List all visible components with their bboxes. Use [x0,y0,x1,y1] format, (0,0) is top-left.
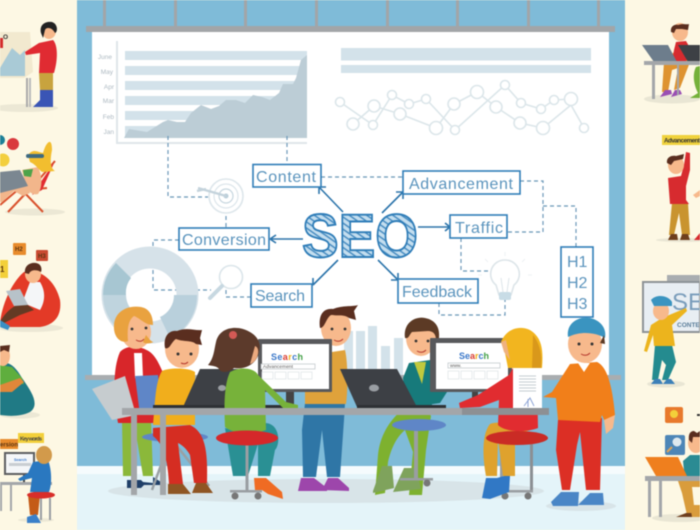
label box: Feedback: Feedback [402,284,473,301]
mini scene: woman on deck chair [0,135,65,216]
mini scene: H tags: H3 [38,254,46,260]
label box: Search [251,284,312,307]
person: standing man [298,305,358,491]
label box: H1 H2 H3: H1 [567,254,588,271]
whiteboard tray [85,375,621,380]
office wall [77,0,625,466]
laptop right [340,369,446,408]
mini scene: H tags: 1 [0,265,5,274]
SEO title: SEO [302,202,418,270]
area chart: May [101,69,114,76]
mini scene: boy at monitor with tags [0,433,55,523]
monitor left: Advancement [263,364,294,370]
window frame [86,0,615,32]
label box: Feedback [398,279,478,303]
label box: Advancement [403,171,520,194]
mini scene: woman at flip chart: O [3,34,8,41]
monitor right: www. [450,364,461,369]
label box: Traffic: Traffic [455,220,503,237]
icon: light bulb [478,252,532,300]
mini scene: boy at monitor with tags: Key words [20,436,42,442]
area chart: June [98,54,112,61]
stool right [500,440,533,500]
whiteboard [92,32,609,375]
label box: Advancement: Advancement [409,176,514,193]
person: boy in yellow sweater [153,329,213,494]
top right bars [341,48,591,73]
area chart: Apr [104,84,115,91]
mini scene: H tags [0,243,48,278]
mini scene: man on teal bean bag [0,345,40,418]
mini scene: H tags: H2 [15,247,23,253]
person: boy in blue cap [543,318,615,506]
grey laptop left [92,376,136,420]
arrows from SEO [270,187,450,285]
label box: Traffic [450,215,507,238]
label box: Search: Search [255,288,305,305]
area chart [98,41,307,143]
mini scene: boy at SEO board [643,275,700,388]
person: man in teal jacket [373,318,447,495]
left cream panel [0,0,77,530]
area chart: Jan [104,129,114,136]
person: girl in green hoodie [208,328,298,499]
blue stool [392,419,446,486]
area chart: Feb [103,114,114,121]
desk [122,408,549,495]
label box: Content [253,164,321,187]
label box: H1 H2 H3 [561,247,593,317]
right cream panel [625,0,700,530]
floor shadow: right boy [546,501,616,511]
area chart: Mar [103,98,115,105]
monitor left: Search [271,352,303,362]
monitor right [430,338,512,406]
monitor right: Search [459,351,489,361]
line chart [336,80,588,134]
red stool left [216,430,278,500]
mini scene: man pointing up: Advancement [664,138,700,144]
icon: magnifier [210,266,242,298]
mini scene: woman at flip chart [0,22,58,112]
office floor [77,466,625,530]
mini scene: man pointing up [656,135,700,242]
person: woman in red jacket [114,307,166,488]
label box: Content: Content [256,169,317,186]
laptop behind desk [153,369,285,408]
mini scene: boy at monitor with tags: ersion [0,442,18,448]
monitor left [258,339,332,406]
mini scene: man at orange laptop [645,407,700,522]
mini scene: man at laptop [642,23,700,104]
mini scene: man on red bean bag [0,263,63,332]
label box: H1 H2 H3: H3 [567,296,588,313]
mini scene: boy at monitor with tags: Search [14,458,27,462]
label box: H1 H2 H3: H2 [567,275,588,292]
document [513,368,542,411]
person: blonde woman [459,328,548,499]
blue chair [135,375,209,490]
bar chart behind team [344,326,403,375]
icon: target [197,179,243,213]
floor shadow [108,479,544,503]
donut chart [103,258,197,338]
dashed connectors [153,136,576,315]
label box: Conversion: Conversion [182,232,266,249]
